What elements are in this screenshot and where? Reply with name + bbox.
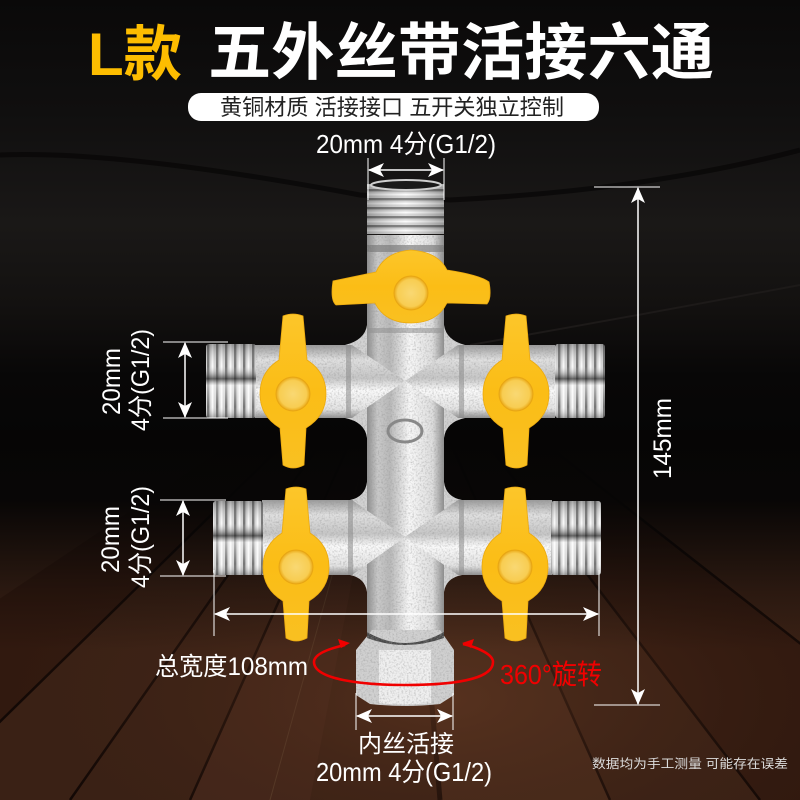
- handle: upper right: [483, 314, 549, 468]
- dimension: top width: [316, 129, 496, 200]
- handle: lower right: [482, 487, 548, 641]
- thread: top: [367, 180, 444, 234]
- thread: upper left: [206, 344, 256, 418]
- metal body: [255, 235, 555, 640]
- handle: lower left: [263, 487, 329, 641]
- label: female union thread: 内丝活接: [358, 731, 454, 758]
- label: 360 rotation: 360°旋转: [500, 659, 602, 690]
- logo stamp: [388, 420, 422, 442]
- union nut: [356, 630, 454, 706]
- handle: upper left: [260, 314, 326, 468]
- subtitle pill: 黄铜材质 活接接口 五开关独立控制: [220, 95, 564, 120]
- dimension: upper branch: 4分(G1/2): [127, 329, 155, 431]
- dimension: nut width: [356, 693, 453, 730]
- dimension: total width: [214, 570, 599, 636]
- rotation arrow: 360 degrees: [314, 639, 493, 685]
- dimension: lower branch: [97, 486, 226, 588]
- background: silk wave highlights: [0, 150, 800, 345]
- footnote: 数据均为手工测量 可能存在误差: [592, 756, 788, 771]
- valve assembly: [206, 180, 605, 706]
- dimension: lower branch: 20mm: [97, 506, 125, 573]
- thread: upper right: [555, 344, 605, 418]
- dimension: upper branch: 20mm: [98, 348, 126, 415]
- dimension: top width: 20mm 4分(G1/2): [316, 129, 496, 159]
- dimension: height 145mm: [594, 187, 677, 705]
- label: total width 108mm: 总宽度108mm: [155, 653, 308, 681]
- label: female union thread: [316, 731, 492, 787]
- dimension: height 145mm: 145mm: [649, 398, 677, 479]
- dimension: upper branch: [98, 329, 228, 431]
- thread: lower right: [551, 501, 601, 575]
- title: main heading: 五外丝带活接六通: [208, 19, 714, 88]
- thread: lower left: [213, 501, 263, 575]
- handle: top: [332, 250, 490, 323]
- title: L款: L款: [88, 21, 182, 88]
- background: wooden floor: [0, 516, 800, 800]
- label: female union thread: 20mm 4分(G1/2): [316, 757, 492, 787]
- dimension: lower branch: 4分(G1/2): [127, 486, 155, 588]
